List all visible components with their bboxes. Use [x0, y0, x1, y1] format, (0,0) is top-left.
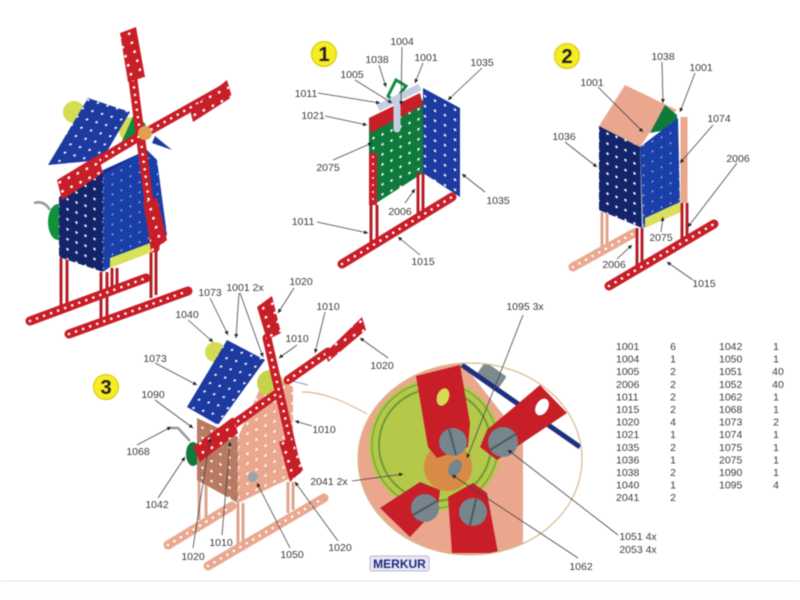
step 3 labels: 1010: [316, 301, 340, 313]
parts list table: 1068: [719, 404, 743, 416]
parts list table: 1038: [616, 467, 640, 479]
parts list table: 2: [670, 391, 676, 403]
parts list table: 2041: [616, 492, 640, 504]
parts list table: 1035: [616, 442, 640, 454]
parts list table: [616, 341, 784, 504]
detail circle: hub close-up: [350, 360, 582, 560]
parts list table: 1042: [719, 341, 743, 353]
parts list table: 1075: [719, 442, 743, 454]
parts list table: 6: [670, 341, 676, 353]
detail labels: [310, 301, 657, 573]
step 2 labels: 1036: [552, 131, 576, 143]
step 3 labels: 1042: [145, 499, 169, 511]
step 1 labels: 1011: [292, 216, 314, 228]
step 3 labels: 1050: [280, 549, 304, 561]
step 3 labels: 1020: [328, 542, 352, 554]
parts list table: 1051: [719, 366, 743, 378]
step 3 labels: 1040: [175, 309, 199, 321]
parts list table: 1: [670, 480, 676, 492]
parts list table: 1074: [719, 429, 743, 441]
step 1 labels: 1035: [470, 57, 494, 69]
step 3 labels: 1020: [181, 551, 205, 563]
parts list table: 1: [773, 341, 779, 353]
parts list table: 4: [773, 480, 779, 492]
parts list table: 2006: [616, 379, 640, 391]
parts list table: 1: [773, 354, 779, 366]
parts list table: 1062: [719, 391, 743, 403]
parts list table: 2: [670, 442, 676, 454]
parts list table: 1090: [719, 467, 743, 479]
step 3 labels: 1010: [312, 424, 336, 436]
callout connector: [302, 392, 367, 414]
detail labels: 1095 3x: [506, 301, 544, 313]
step 1 labels: 2075: [316, 162, 340, 174]
parts list table: 2: [670, 366, 676, 378]
step 3 badge: [94, 374, 118, 400]
step 3 labels: 1073: [143, 353, 167, 365]
parts list table: 40: [772, 379, 784, 391]
step 2 labels: 2006: [726, 153, 750, 165]
parts list table: 40: [772, 366, 784, 378]
step 1 labels: 1015: [411, 256, 435, 268]
step 1 labels: 1035: [486, 195, 510, 207]
parts list table: 2075: [719, 454, 743, 466]
parts list table: 1: [773, 391, 779, 403]
step 2 badge: 2: [561, 46, 573, 68]
parts list table: 2: [773, 417, 779, 429]
parts list table: 1050: [719, 354, 743, 366]
step 1 labels: 1021: [301, 110, 325, 122]
step 2 labels: 2006: [602, 259, 626, 271]
step 2 labels: 1038: [651, 51, 675, 63]
parts list table: 1020: [616, 417, 640, 429]
MERKUR logo: MERKUR: [373, 557, 426, 571]
parts list table: 2: [670, 404, 676, 416]
step 3 labels: 1073: [198, 287, 222, 299]
detail labels: 1051 4x: [619, 531, 657, 543]
step 1 labels: 2006: [388, 206, 412, 218]
parts list table: 1: [773, 454, 779, 466]
step 3 labels: 1090: [141, 389, 165, 401]
parts list table: 1: [773, 404, 779, 416]
parts list table: 1: [773, 467, 779, 479]
step 1 labels: 1004: [390, 36, 414, 48]
parts list table: 1004: [616, 354, 640, 366]
parts list table: 2: [670, 467, 676, 479]
step 1 badge: 1: [318, 44, 330, 66]
step 2 labels: 1001: [580, 77, 604, 89]
parts list table: 1040: [616, 480, 640, 492]
step 2 badge: [554, 44, 580, 68]
parts list table: 1036: [616, 454, 640, 466]
detail labels: 2041 2x: [310, 476, 348, 488]
parts list table: 1: [773, 442, 779, 454]
step 3 labels: 1020: [289, 276, 313, 288]
step 1 badge: [312, 42, 336, 66]
step 1 labels: 1001: [414, 52, 438, 64]
step 3 labels: 1020: [370, 360, 394, 372]
step 1 assembly: [342, 80, 460, 264]
step 1 labels: 1011: [295, 88, 317, 100]
parts list table: 1052: [719, 379, 743, 391]
parts list table: 1: [670, 429, 676, 441]
step 2 labels: 1001: [689, 62, 713, 74]
step 1 labels: 1038: [365, 54, 389, 66]
step 3 labels: [126, 276, 394, 563]
step 1 labels: 1005: [340, 69, 364, 81]
parts list table: 1: [670, 454, 676, 466]
parts list table: 1015: [616, 404, 640, 416]
step 3 labels: 1068: [126, 446, 150, 458]
step 3 labels: 1010: [209, 537, 233, 549]
step 3 assembly: [168, 296, 366, 566]
step 3 labels: 1010: [285, 333, 309, 345]
parts list table: 2: [670, 379, 676, 391]
step 2 labels: 1074: [707, 113, 731, 125]
parts list table: 1073: [719, 417, 743, 429]
step 2 assembly: [573, 85, 714, 286]
parts list table: 1095: [719, 480, 743, 492]
detail labels: 1062: [569, 561, 593, 573]
finished windmill illustration: [30, 27, 232, 334]
step 1 labels: [292, 36, 510, 268]
step 2 labels: [552, 51, 750, 290]
parts list table: 1021: [616, 429, 640, 441]
step 3 badge: 3: [100, 377, 112, 399]
parts list table: 1: [773, 429, 779, 441]
parts list table: 1011: [616, 391, 639, 403]
parts list table: 2: [670, 492, 676, 504]
step 2 labels: 2075: [649, 232, 673, 244]
parts list table: 1005: [616, 366, 640, 378]
parts list table: 1001: [616, 341, 640, 353]
parts list table: 4: [670, 417, 676, 429]
parts list table: 1: [670, 354, 676, 366]
detail labels: 2053 4x: [619, 544, 657, 556]
step 3 labels: 1001 2x: [226, 282, 264, 294]
bottom divider strip: [0, 581, 800, 600]
step 2 labels: 1015: [692, 278, 716, 290]
